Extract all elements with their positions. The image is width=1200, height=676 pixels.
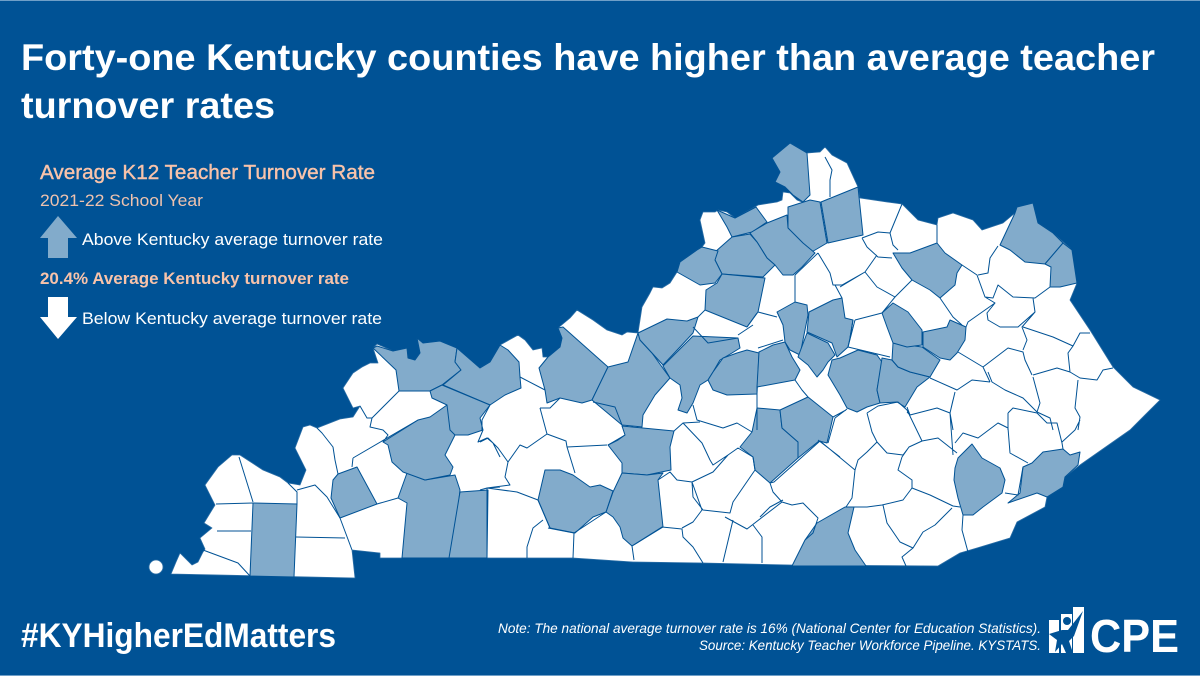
legend heading: Average K12 Teacher Turnover Rate <box>40 162 375 184</box>
title <box>21 37 1155 126</box>
CPE logo <box>1049 607 1179 662</box>
state silhouette <box>149 143 1160 578</box>
icon: up arrow <box>40 216 77 258</box>
source note <box>498 620 1041 653</box>
hashtag: #KYHigherEdMatters <box>21 617 336 655</box>
legend above label: Above Kentucky average turnover rate <box>82 230 383 249</box>
icon: bars with figure <box>1049 607 1084 653</box>
icon: down arrow <box>40 297 77 339</box>
source note: Source: Kentucky Teacher Workforce Pipeline. KYSTATS. <box>699 637 1041 653</box>
legend average value: 20.4% Average Kentucky turnover rate <box>40 270 349 288</box>
map of Kentucky counties <box>149 143 1160 578</box>
source note: Note: The national average turnover rate is 16% (National Center for Education Statistics). <box>498 620 1041 636</box>
wordmark: CPE <box>1090 610 1179 662</box>
county boundary lines <box>203 157 1113 576</box>
title: Forty-one Kentucky counties have higher than average teacher <box>21 37 1155 78</box>
title: turnover rates <box>21 85 275 126</box>
island <box>149 560 163 574</box>
legend <box>40 162 383 339</box>
counties above average <box>250 143 1080 577</box>
legend subheading: 2021-22 School Year <box>40 191 203 210</box>
legend below label: Below Kentucky average turnover rate <box>82 309 382 328</box>
